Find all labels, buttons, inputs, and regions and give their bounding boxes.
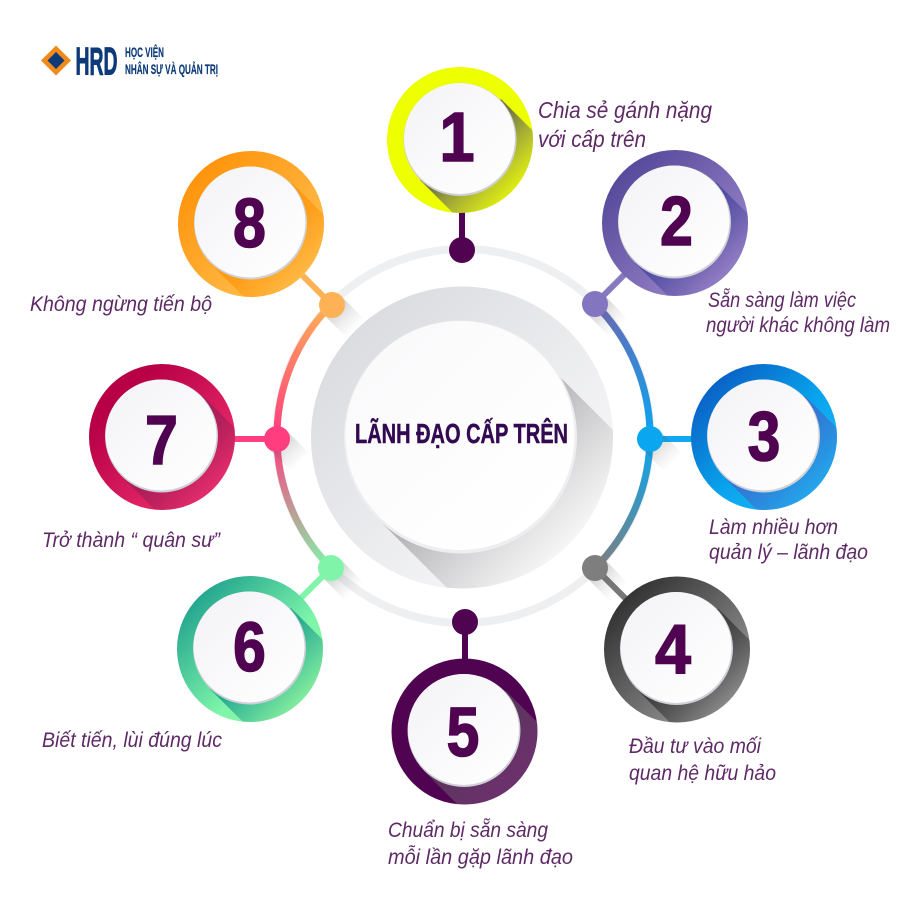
label 3 (709, 516, 868, 564)
label 2 (706, 289, 890, 337)
number 3: 3 (748, 396, 780, 475)
label 1: Chia sẻ gánh nặng (538, 97, 712, 123)
label 1 (538, 97, 712, 152)
step 6 circle (177, 576, 323, 722)
logo: HRD: HỌC VIỆN (125, 45, 164, 60)
label 4: Đầu tư vào mối (629, 735, 762, 758)
label 8: Không ngừng tiến bộ (30, 293, 212, 316)
step 1 circle (387, 67, 533, 213)
step 2 circle (602, 150, 748, 296)
step 8 circle (178, 151, 324, 297)
label 3: quản lý – lãnh đạo (709, 541, 868, 564)
label 4 (629, 735, 776, 785)
centre title: LÃNH ĐẠO CẤP TRÊN (355, 418, 568, 449)
label 4: quan hệ hữu hảo (629, 762, 776, 785)
number 5: 5 (447, 692, 479, 771)
label 5: mỗi lần gặp lãnh đạo (388, 846, 573, 869)
number 6: 6 (233, 607, 266, 686)
central ring with coloured arcs (276, 249, 650, 623)
number 8: 8 (233, 183, 266, 262)
number 1: 1 (439, 99, 475, 177)
logo: HRD: NHÂN SỰ VÀ QUẢN TRỊ (125, 62, 218, 77)
number 4: 4 (655, 611, 691, 689)
label 7: Trở thành “ quân sư” (42, 529, 221, 552)
step 3 circle (691, 364, 837, 510)
step 4 circle (604, 576, 750, 722)
label 5 (388, 819, 573, 869)
connectors between nodes and step circles (226, 205, 700, 668)
ring nodes (264, 237, 685, 635)
number 2: 2 (660, 181, 693, 260)
label 6: Biết tiến, lùi đúng lúc (42, 729, 222, 752)
centre hub (311, 286, 613, 588)
step 7 circle (89, 364, 235, 510)
label 3: Làm nhiều hơn (709, 516, 838, 539)
number 7: 7 (145, 400, 178, 479)
label 2: Sẵn sàng làm việc (708, 289, 856, 312)
logo: HRD (41, 40, 218, 84)
logo: HRD: HRD (76, 40, 118, 84)
label 5: Chuẩn bị sẵn sàng (388, 819, 548, 842)
label 1: với cấp trên (538, 126, 646, 152)
step 5 circle (392, 658, 538, 804)
